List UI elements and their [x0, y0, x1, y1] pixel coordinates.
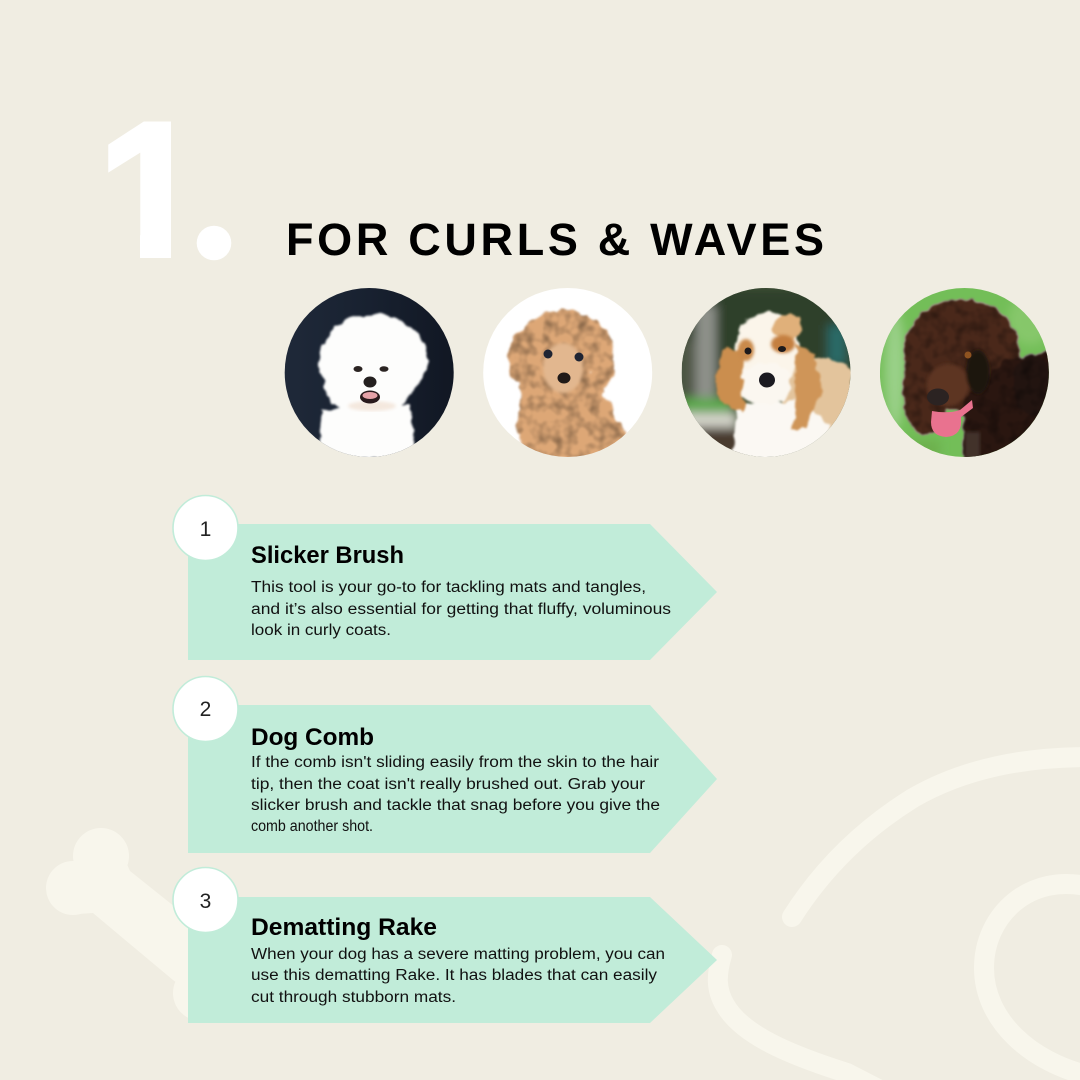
- panel: dematting rake: [173, 868, 717, 1023]
- description: slicker brush: [251, 579, 671, 639]
- description: dog comb: [251, 754, 660, 835]
- arrow panel 3: [188, 897, 717, 1023]
- photo: apricot poodle puppy: [483, 288, 653, 467]
- description: dematting rake: cut through stubborn mats.: [251, 989, 456, 1006]
- decorative curved lines: [718, 757, 1080, 1080]
- heading: slicker brush: Slicker Brush: [251, 542, 404, 569]
- number dot: [197, 226, 231, 260]
- number badge 1: [173, 496, 238, 560]
- photo: cream and white doodle puppy: [682, 288, 852, 462]
- big number 1.: 1: [98, 83, 206, 300]
- description: dematting rake: [251, 946, 665, 1006]
- arrow panel 1: [188, 524, 717, 660]
- number badge 1: 1: [200, 518, 211, 541]
- description: dog comb: comb another shot.: [251, 818, 373, 835]
- heading: dog comb: Dog Comb: [251, 724, 374, 751]
- description: dematting rake: When your dog has a severe matting problem, you can: [251, 946, 665, 963]
- arrow panel 2: [188, 705, 717, 853]
- photo: dark brown curly water spaniel: [880, 288, 1052, 462]
- decorative bone: [46, 828, 229, 1021]
- description: slicker brush: and it’s also essential for getting that fluffy, voluminous: [251, 601, 671, 618]
- number badge 3: [173, 868, 238, 932]
- description: dog comb: tip, then the coat isn't really brushed out. Grab your: [251, 776, 645, 793]
- panel: dog comb: [173, 676, 717, 853]
- number badge 2: 2: [200, 698, 211, 721]
- number badge 3: 3: [200, 890, 211, 913]
- number badge 2: [173, 676, 238, 742]
- description: dog comb: slicker brush and tackle that snag before you give the: [251, 797, 660, 814]
- heading: dematting rake: Dematting Rake: [251, 914, 437, 941]
- big number 1.: [108, 122, 232, 260]
- description: slicker brush: This tool is your go-to for tackling mats and tangles,: [251, 579, 646, 596]
- description: dematting rake: use this dematting Rake. It has blades that can easily: [251, 967, 657, 984]
- title: FOR CURLS & WAVES: [286, 214, 824, 265]
- panel: slicker brush: [173, 496, 717, 660]
- photo: white bichon frise: [284, 288, 454, 460]
- description: slicker brush: look in curly coats.: [251, 622, 391, 639]
- description: dog comb: If the comb isn't sliding easily from the skin to the hair: [251, 754, 659, 771]
